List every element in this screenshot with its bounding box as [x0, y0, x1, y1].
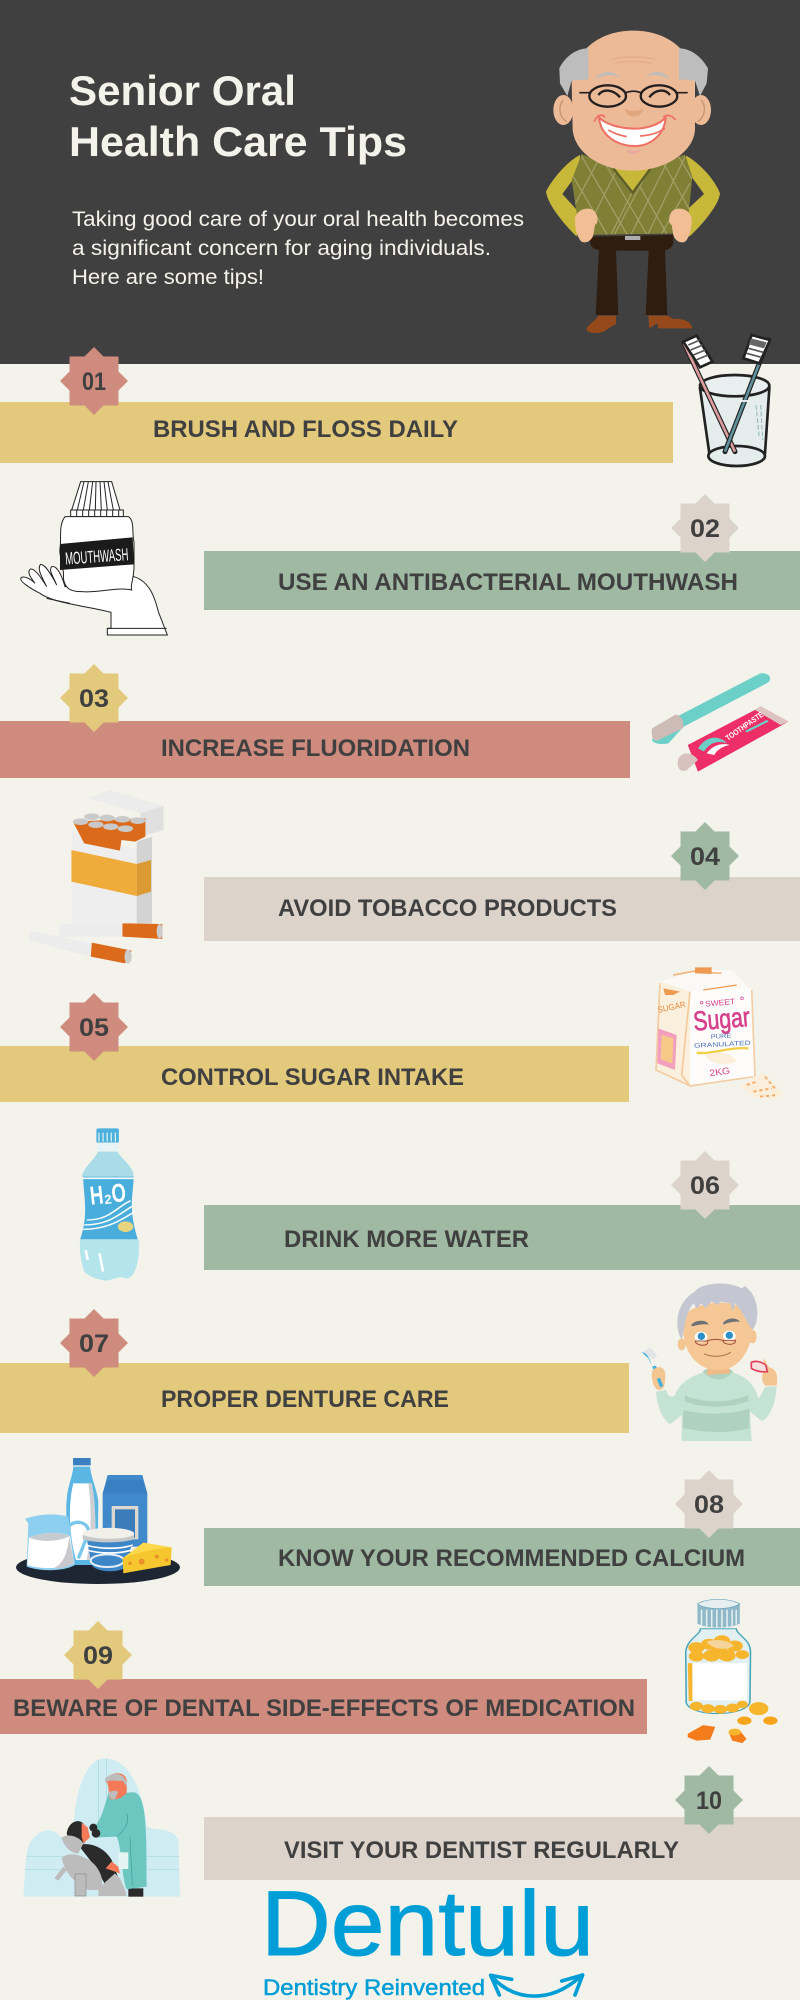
panel: tip 10 bar	[204, 1817, 800, 1880]
badge 10	[675, 1766, 743, 1834]
badge 05	[60, 993, 128, 1061]
badge 07	[60, 1309, 128, 1377]
badge 03: 03	[79, 685, 109, 713]
badge 09	[64, 1621, 132, 1689]
badge 08	[675, 1470, 743, 1538]
badge 03	[60, 664, 128, 732]
badge 06	[671, 1151, 739, 1219]
icon: sugar bag: 2KG	[709, 1066, 731, 1078]
badge 07: 07	[79, 1330, 109, 1358]
badge 06: 06	[690, 1172, 720, 1200]
badge 02	[671, 494, 739, 562]
badge 05: 05	[79, 1014, 109, 1042]
icon: sugar bag: GRANULATED	[694, 1040, 751, 1050]
logo: Dentulu: Dentistry Reinvented	[263, 1975, 485, 2000]
icon: sugar bag: SWEET	[705, 997, 736, 1009]
icon: water bottle	[80, 1128, 139, 1281]
panel: tip 05 bar	[0, 1046, 629, 1102]
icon: cigarette pack	[28, 790, 163, 964]
icon: mouthwash bottle on hand	[21, 482, 167, 635]
panel: tip 09 bar	[0, 1679, 647, 1734]
intro text: Here are some tips!	[72, 265, 264, 289]
panel: tip 07 bar: PROPER DENTURE CARE	[161, 1386, 449, 1413]
icon: sugar bag: SUGAR	[657, 999, 686, 1015]
icon: dairy products	[16, 1458, 180, 1584]
panel: tip 03 bar	[0, 721, 630, 778]
panel: tip 09 bar: BEWARE OF DENTAL SIDE-EFFECTS OF MEDICATION	[13, 1695, 635, 1722]
icon: water bottle: H₂O	[88, 1177, 127, 1211]
icon: toothbrush and toothpaste: TOOTHPASTE	[724, 710, 766, 743]
panel: tip 05 bar: CONTROL SUGAR INTAKE	[161, 1064, 464, 1091]
icon: toothbrushes in glass	[683, 335, 770, 466]
badge 10: 10	[696, 1787, 722, 1815]
icon: toothbrush and toothpaste	[652, 673, 788, 772]
icon: sugar bag: PURE	[711, 1033, 732, 1041]
title: Health Care Tips	[69, 118, 407, 165]
panel: tip 07 bar	[0, 1363, 629, 1433]
panel: tip 10 bar: VISIT YOUR DENTIST REGULARLY	[284, 1837, 679, 1864]
badge 09: 09	[83, 1642, 113, 1670]
icon: sugar bag: Sugar	[692, 1001, 751, 1037]
logo: Dentulu: Dentulu	[261, 1873, 594, 1975]
badge 04	[671, 822, 739, 890]
panel: tip 01 bar	[0, 402, 673, 463]
panel: tip 06 bar	[204, 1205, 800, 1270]
title: Senior Oral	[69, 67, 296, 114]
icon: pill bottle	[686, 1599, 778, 1743]
icon: smiling senior man	[546, 31, 720, 333]
icon: mouthwash bottle on hand: MOUTHWASH	[64, 544, 129, 569]
badge 01: 01	[82, 368, 106, 396]
badge 02: 02	[690, 515, 720, 543]
panel: tip 08 bar: KNOW YOUR RECOMMENDED CALCIUM	[278, 1545, 745, 1572]
panel: tip 04 bar	[204, 877, 800, 941]
badge 08: 08	[694, 1491, 724, 1519]
intro text	[72, 207, 524, 289]
intro text: Taking good care of your oral health becomes	[72, 207, 524, 231]
panel: tip 02 bar	[204, 551, 800, 610]
badge 04: 04	[690, 843, 720, 871]
icon: smile arrow	[491, 1975, 583, 1996]
panel: tip 06 bar: DRINK MORE WATER	[284, 1226, 529, 1253]
panel: tip 03 bar: INCREASE FLUORIDATION	[161, 735, 470, 762]
icon: dentist treating patient	[23, 1758, 180, 1897]
header panel	[0, 0, 800, 364]
title	[69, 67, 407, 165]
badge 01	[60, 347, 128, 415]
panel: tip 08 bar	[204, 1528, 800, 1586]
intro text: a significant concern for aging individuals.	[72, 236, 491, 260]
panel: tip 01 bar: BRUSH AND FLOSS DAILY	[153, 416, 458, 443]
panel: tip 02 bar: USE AN ANTIBACTERIAL MOUTHWASH	[278, 569, 738, 596]
icon: sugar bag	[656, 967, 783, 1101]
icon: senior with toothbrush and dentures	[642, 1284, 777, 1441]
panel: tip 04 bar: AVOID TOBACCO PRODUCTS	[278, 895, 617, 922]
